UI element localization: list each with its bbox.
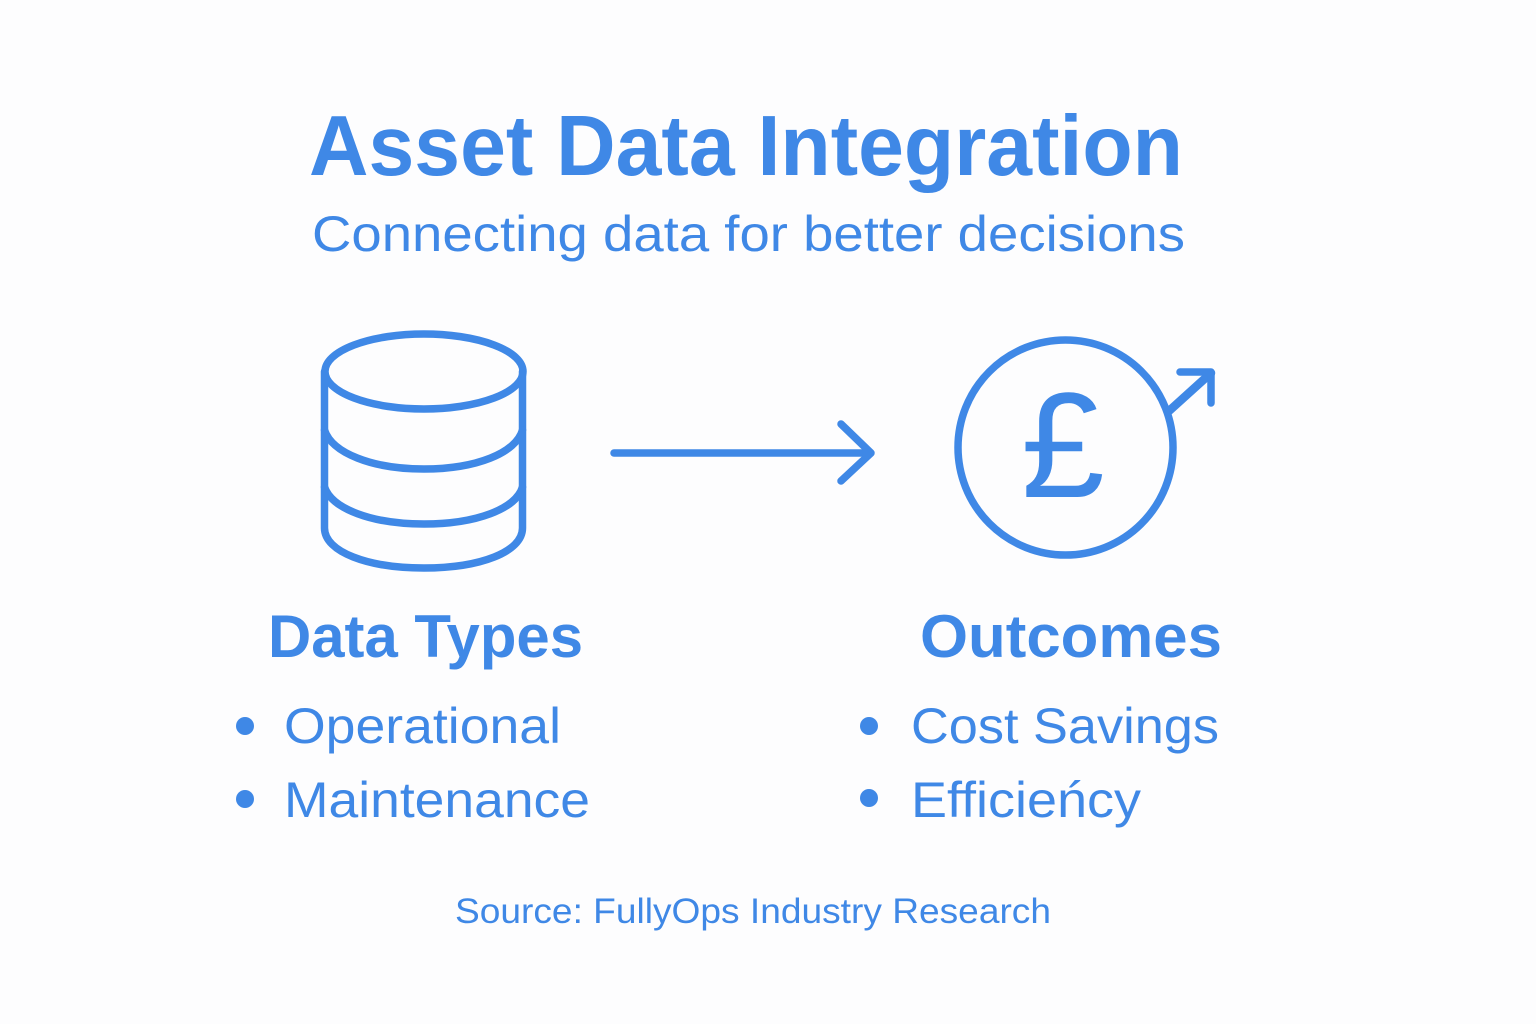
list: data types — [236, 698, 590, 828]
source note: Source: FullyOps Industry Research — [455, 891, 1051, 931]
list: outcomes: Cost Savings — [911, 698, 1219, 754]
arrow: data to outcomes — [614, 424, 871, 481]
title: Asset Data Integration — [309, 99, 1183, 194]
list: data types: Maintenance — [284, 772, 590, 828]
icon: pound coin with growth arrow: £ — [1021, 361, 1105, 529]
list: data types: Operational — [284, 698, 561, 754]
icon: database cylinder — [324, 334, 523, 568]
subtitle: Connecting data for better decisions — [312, 206, 1185, 262]
list: outcomes: Efficieńcy — [911, 772, 1141, 828]
list: outcomes — [860, 698, 1219, 828]
heading: outcomes: Outcomes — [920, 603, 1222, 670]
heading: data types: Data Types — [268, 603, 583, 670]
icon: pound coin with growth arrow — [958, 340, 1211, 555]
